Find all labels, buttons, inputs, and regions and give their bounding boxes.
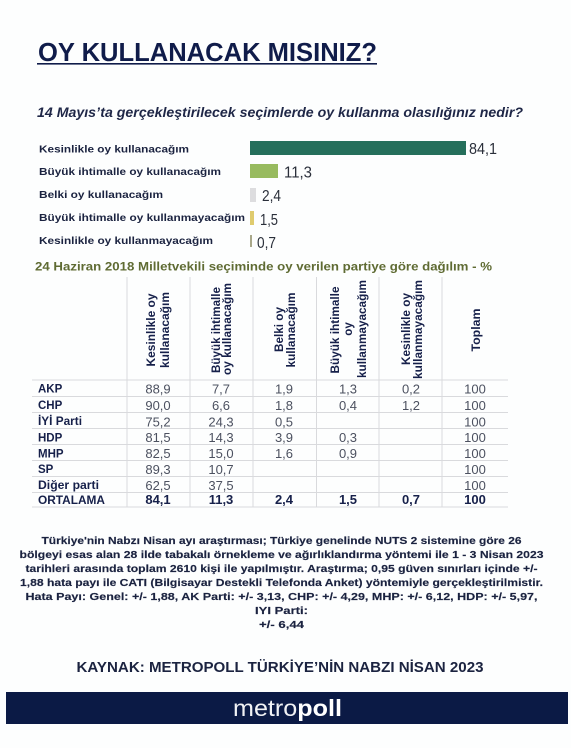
- table column headers: Kesinlikle oy: [146, 293, 158, 366]
- methodology note: [20, 535, 544, 631]
- methodology note: +/- 6,44: [259, 619, 304, 631]
- logo: metropoll: metropoll: [233, 695, 342, 721]
- table values: 11,3: [209, 492, 233, 507]
- table values: 100: [464, 414, 486, 430]
- table values: 7,7: [212, 382, 230, 396]
- bar row: Büyük ihtimalle oy kullanmayacağım: [39, 211, 278, 229]
- table values: 62,5: [145, 478, 171, 493]
- bar chart: voting likelihood: [39, 141, 497, 252]
- bar row: Kesinlikle oy kullanmayacağım: [39, 235, 276, 252]
- table values: 90,0: [145, 398, 171, 413]
- bar row: Kesinlikle oy kullanacağım: Kesinlikle oy kullanacağım: [39, 144, 189, 156]
- table column headers: kullanacağım: [160, 292, 172, 368]
- source line: KAYNAK: METROPOLL TÜRKİYE’NİN NABZI NİSAN 2023: [76, 659, 483, 676]
- table row labels: [38, 384, 105, 507]
- table heading: 24 Haziran 2018 Milletvekili seçiminde oy verilen partiye göre dağılım - %: [35, 260, 492, 274]
- methodology note: Hata Payı: Genel: +/- 1,88, AK Parti: +/- 3,13, CHP: +/- 4,29, MHP: +/- 6,12, HDP: +/- 5,97,: [26, 591, 538, 603]
- table values: 1,8: [275, 398, 293, 413]
- table values: 1,3: [339, 382, 357, 396]
- bar row: Büyük ihtimalle oy kullanacağım: [39, 164, 312, 182]
- table values: 100: [464, 462, 486, 477]
- table values: 1,5: [339, 492, 357, 507]
- table values: 82,5: [145, 446, 171, 461]
- methodology note: tarihleri arasında toplam 2610 kişi ile yapılmıştır. Araştırma; 0,95 güven sınırları içinde +/-: [26, 563, 538, 575]
- table row labels: AKP: [38, 384, 63, 396]
- table values: 0,3: [339, 430, 357, 445]
- table values: 75,2: [145, 414, 171, 430]
- bar row: Büyük ihtimalle oy kullanacağım: 11,3: [284, 164, 312, 182]
- table row labels: HDP: [38, 432, 63, 444]
- table values: 100: [464, 382, 486, 396]
- methodology note: IYI Parti:: [255, 605, 308, 617]
- table values: [145, 382, 486, 507]
- table values: 14,3: [208, 430, 234, 445]
- table values: 100: [464, 398, 486, 413]
- table column headers: Toplam: [471, 308, 483, 352]
- methodology note: 1,88 hata payı ile CATI (Bilgisayar Destekli Telefonda Anket) yöntemiyle gerçekleştirilmistir.: [20, 577, 543, 589]
- table values: 0,5: [275, 414, 293, 430]
- table values: 2,4: [275, 492, 294, 507]
- table row labels: SP: [38, 464, 54, 476]
- methodology note: bölgeyi esas alan 28 ilde tabakalı örnekleme ve ağırlıklandırma yöntemi ile 1 - 3 Nisan 2023: [20, 549, 544, 561]
- table column headers: Kesinlikle oy: [401, 292, 413, 365]
- table values: 10,7: [208, 462, 234, 477]
- table column headers: oy: [343, 322, 355, 336]
- table column headers: kullanacağım: [286, 292, 298, 368]
- table values: 15,0: [208, 446, 234, 461]
- table values: 1,9: [275, 382, 293, 396]
- table column headers: [146, 280, 483, 379]
- table values: 0,2: [402, 382, 420, 396]
- table column headers: oy kullanacağım: [222, 283, 234, 375]
- table values: 100: [464, 446, 486, 461]
- table values: 100: [464, 430, 486, 445]
- table values: 1,6: [275, 446, 293, 461]
- table values: 3,9: [275, 430, 293, 445]
- table values: 81,5: [145, 430, 171, 445]
- table row labels: MHP: [38, 448, 64, 460]
- bar row: Kesinlikle oy kullanacağım: [39, 141, 497, 158]
- table values: 84,1: [145, 492, 171, 507]
- table column headers: kullanmayacağım: [413, 280, 425, 379]
- bar row: Belki oy kullanacağım: Belki oy kullanacağım: [39, 189, 163, 201]
- footer band with logo: [6, 692, 568, 724]
- bar row: Belki oy kullanacağım: 2,4: [262, 188, 281, 205]
- question heading: 14 Mayıs’ta gerçekleştirilecek seçimlerde oy kullanma olasılığınız nedir?: [37, 104, 523, 120]
- table values: 0,7: [402, 492, 420, 507]
- bar row: Belki oy kullanacağım: [39, 188, 281, 205]
- table values: 37,5: [208, 478, 234, 493]
- bar row: Büyük ihtimalle oy kullanacağım: Büyük ihtimalle oy kullanacağım: [39, 166, 221, 178]
- bar row: Büyük ihtimalle oy kullanmayacağım: 1,5: [260, 212, 278, 229]
- table values: 24,3: [208, 414, 234, 430]
- bar row: Kesinlikle oy kullanmayacağım: Kesinlikle oy kullanmayacağım: [39, 235, 213, 247]
- bar row: Kesinlikle oy kullanmayacağım: 0,7: [257, 235, 276, 252]
- table row labels: İYİ Parti: [38, 415, 82, 428]
- table values: 100: [464, 492, 486, 507]
- table values: 0,4: [339, 398, 357, 413]
- methodology note: Türkiye'nin Nabzı Nisan ayı araştırması; Türkiye genelinde NUTS 2 sistemine göre 26: [42, 535, 522, 547]
- table column headers: Belki oy: [274, 306, 286, 352]
- table values: 6,6: [212, 398, 230, 413]
- table values: 1,2: [402, 398, 420, 413]
- table column headers: Büyük ihtimalle: [330, 286, 342, 374]
- table values: 0,9: [339, 446, 357, 461]
- table row labels: ORTALAMA: [38, 495, 105, 507]
- table row labels: CHP: [38, 400, 63, 412]
- table column headers: Büyük ihtimalle: [211, 287, 223, 373]
- table values: 89,3: [145, 462, 171, 477]
- bar row: Büyük ihtimalle oy kullanmayacağım: Büyük ihtimalle oy kullanmayacağım: [39, 212, 245, 224]
- title: OY KULLANACAK MISINIZ?: [38, 37, 377, 67]
- table values: 88,9: [145, 382, 171, 396]
- bar row: Kesinlikle oy kullanacağım: 84,1: [469, 141, 497, 158]
- table values: 100: [464, 478, 486, 493]
- table column headers: kullanmayacağım: [357, 280, 369, 378]
- table row labels: Diğer parti: [38, 480, 99, 492]
- table: distribution by party: [32, 277, 508, 507]
